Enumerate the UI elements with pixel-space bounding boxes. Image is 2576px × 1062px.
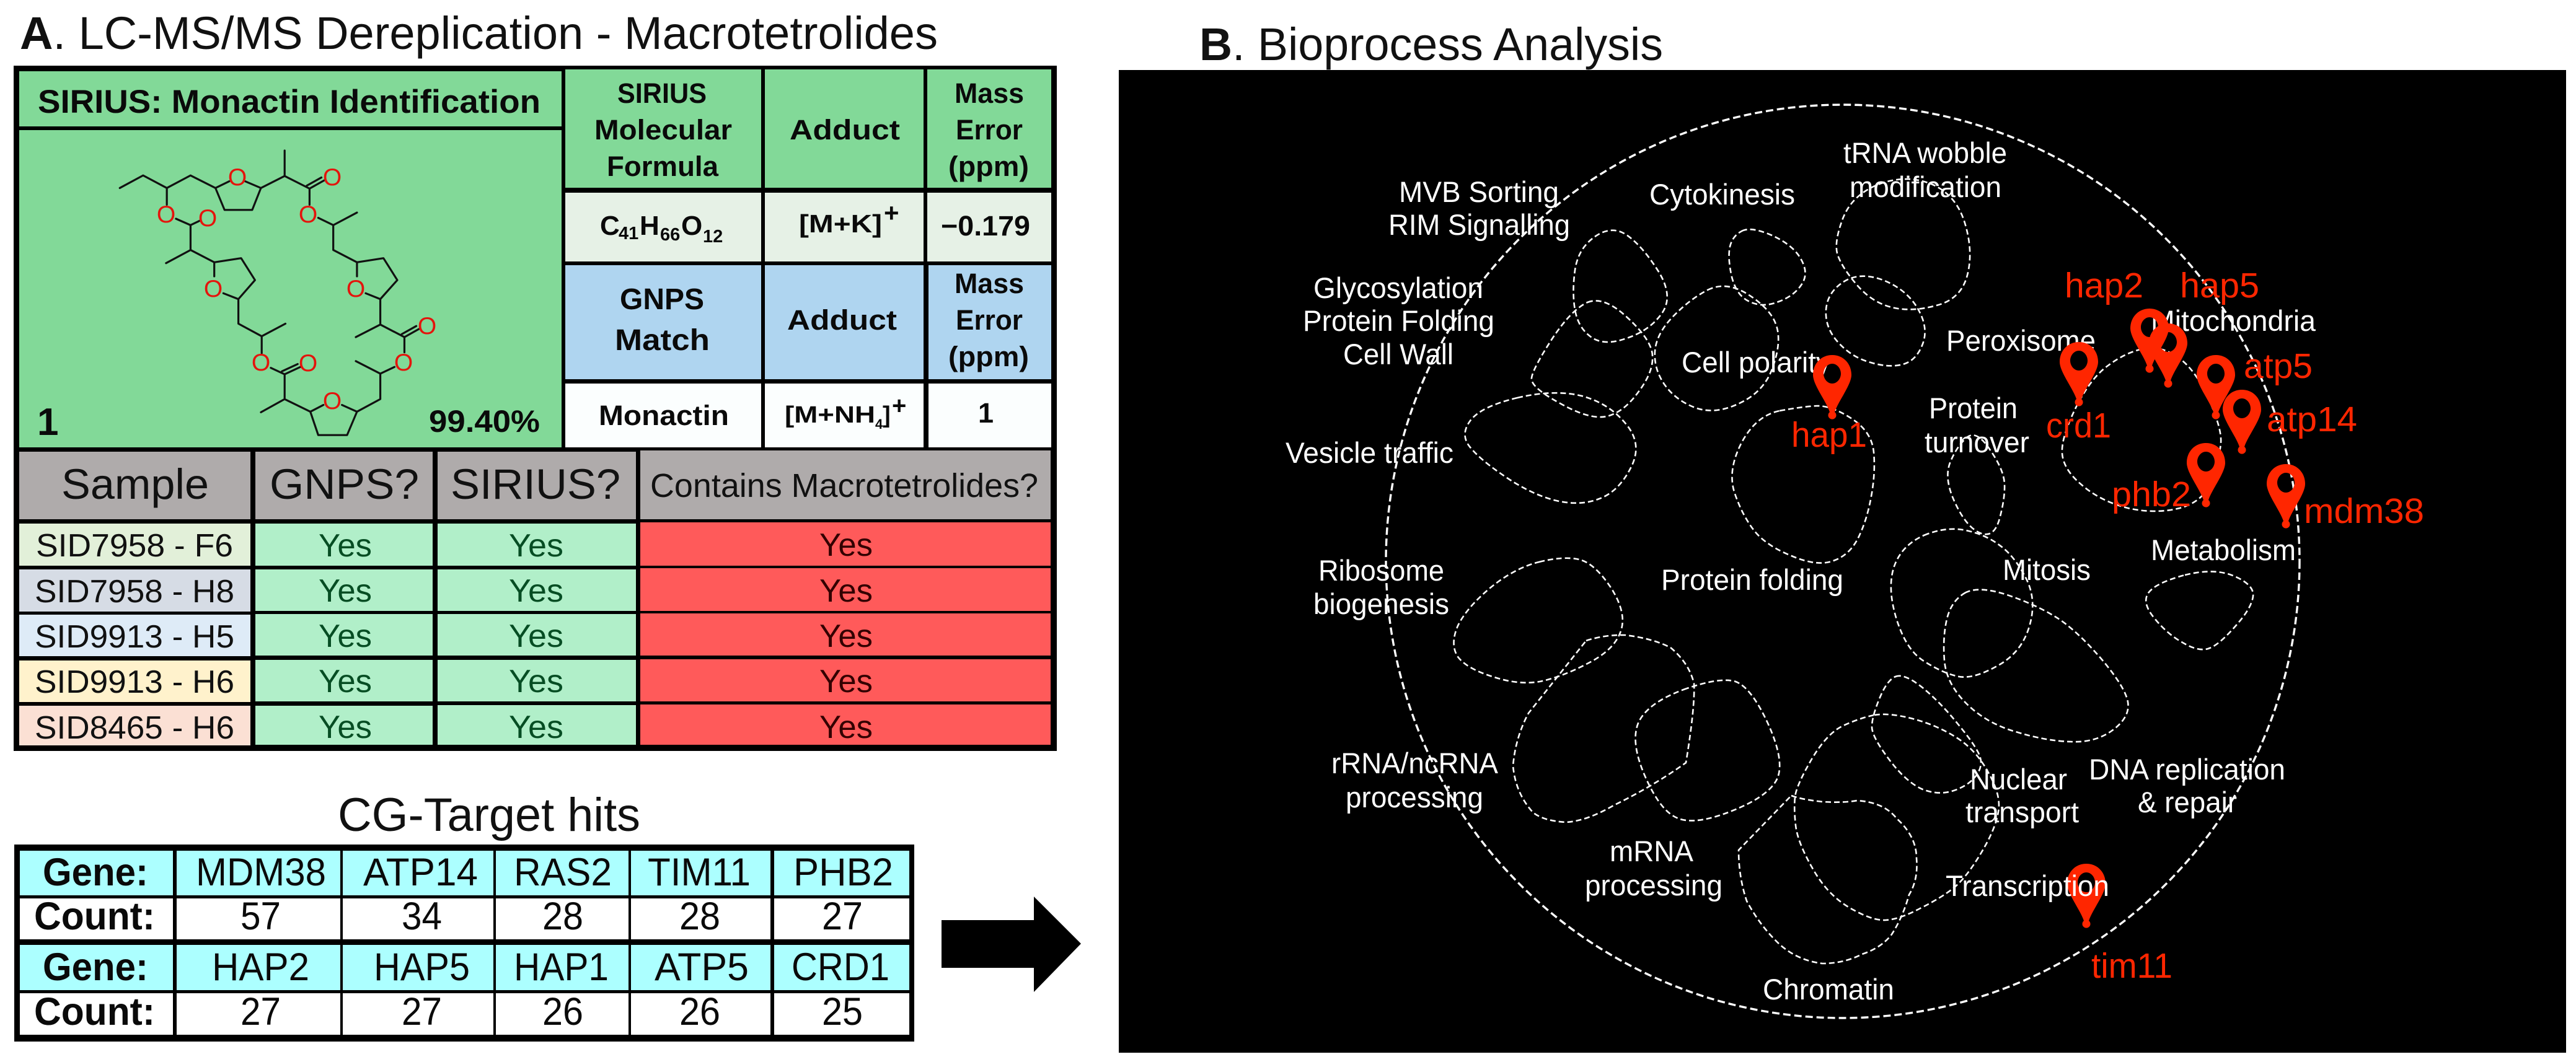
row: SID7958 - H8: Yes bbox=[319, 573, 372, 609]
labels: gene hits: hap5 bbox=[2180, 266, 2259, 305]
panel: SIRIUS formula table: SIRIUS bbox=[617, 77, 707, 109]
labels: bioprocess names bbox=[1286, 136, 2316, 1006]
labels: gene hits: crd1 bbox=[2046, 406, 2111, 445]
panel: SIRIUS formula table bbox=[565, 69, 1051, 261]
panel: CG-Target hits table bbox=[14, 845, 914, 1042]
row: SID8465 - H6 bbox=[19, 704, 1051, 746]
chemical structure: monactin: O bbox=[198, 205, 217, 232]
row: gene names top: MDM38 bbox=[196, 851, 326, 894]
row: SID7958 - F6: Yes bbox=[819, 527, 873, 563]
labels: gene hits: tim11 bbox=[2091, 946, 2172, 986]
labels: bioprocess names: Chromatin bbox=[1763, 973, 1894, 1006]
labels: gene hits: phb2 bbox=[2112, 475, 2191, 514]
labels: bioprocess names: Protein Folding bbox=[1303, 304, 1494, 337]
row: gene names top: Gene: bbox=[43, 851, 148, 894]
row: gene names bottom: HAP2 bbox=[212, 946, 309, 989]
match score: 99.40% bbox=[429, 404, 540, 439]
panel: GNPS match table: Mass bbox=[955, 268, 1024, 299]
row: SID9913 - H5 bbox=[19, 613, 1051, 656]
row: SID8465 - H6: SID8465 - H6 bbox=[35, 710, 234, 746]
table header row: Contains Macrotetrolides? bbox=[650, 467, 1038, 504]
row: counts bottom: 25 bbox=[822, 990, 863, 1033]
panel: GNPS match table: Adduct bbox=[787, 304, 897, 336]
labels: bioprocess names: rRNA/ncRNA bbox=[1331, 747, 1499, 779]
panel: GNPS match table: Match bbox=[615, 324, 710, 357]
row: gene names top: ATP14 bbox=[363, 851, 478, 894]
labels: bioprocess names: RIM Signalling bbox=[1388, 208, 1570, 241]
row: SID9913 - H6: SID9913 - H6 bbox=[35, 664, 234, 700]
panel: SIRIUS formula table: 41 bbox=[619, 224, 638, 244]
row: SID9913 - H6: Yes bbox=[319, 664, 372, 700]
row: SID7958 - H8: Yes bbox=[819, 573, 873, 609]
row: SID7958 - F6: SID7958 - F6 bbox=[36, 528, 233, 564]
row: SID9913 - H6: Yes bbox=[819, 664, 873, 700]
row: gene names bottom: ATP5 bbox=[655, 946, 749, 989]
panel: GNPS match table: ] bbox=[883, 402, 891, 428]
row: SID7958 - F6: Yes bbox=[319, 528, 372, 564]
labels: bioprocess names: modification bbox=[1850, 170, 2001, 203]
row: counts bottom: 26 bbox=[542, 990, 583, 1033]
labels: gene hits: mdm38 bbox=[2304, 491, 2424, 531]
chemical structure: monactin: O bbox=[323, 164, 342, 191]
labels: gene hits: atp14 bbox=[2267, 400, 2357, 439]
label: Transcription: Transcription bbox=[1946, 869, 2109, 902]
labels: bioprocess names: Mitochondria bbox=[2151, 304, 2316, 337]
panel: SIRIUS formula table: O bbox=[681, 211, 702, 241]
row: SID8465 - H6: Yes bbox=[509, 709, 563, 745]
row: counts top: 28 bbox=[679, 895, 720, 938]
chart: process cluster outlines bbox=[1454, 179, 2253, 963]
row: gene names top: RAS2 bbox=[514, 851, 612, 894]
panel: SIRIUS formula table: Adduct bbox=[790, 114, 900, 146]
labels: bioprocess names: processing bbox=[1585, 869, 1722, 902]
icon: map pins bbox=[1813, 309, 2305, 928]
row: SID8465 - H6: Yes bbox=[319, 709, 372, 745]
table header row: GNPS? bbox=[270, 460, 419, 508]
labels: bioprocess names: Cell Wall bbox=[1343, 338, 1453, 371]
row: counts top: 28 bbox=[542, 895, 583, 938]
chemical structure: monactin: O bbox=[157, 201, 175, 228]
row: counts top: 27 bbox=[822, 895, 863, 938]
chemical structure: monactin: O bbox=[394, 349, 413, 376]
heading: SIRIUS identification: SIRIUS: Monactin Identification bbox=[38, 84, 540, 120]
row: SID9913 - H6: Yes bbox=[509, 664, 563, 700]
labels: bioprocess names: Protein bbox=[1929, 392, 2018, 424]
labels: bioprocess names: Cell polarity bbox=[1682, 346, 1830, 379]
labels: gene hits: hap1 bbox=[1791, 415, 1867, 455]
panel: bioprocess map bbox=[1119, 70, 2566, 1053]
row: SID9913 - H5: Yes bbox=[319, 618, 372, 654]
panel: SIRIUS formula table: 12 bbox=[703, 227, 723, 247]
panel: GNPS match table: [M+NH bbox=[785, 402, 875, 428]
row: counts top: 34 bbox=[402, 895, 442, 938]
table header row: Sample bbox=[61, 460, 209, 508]
row: gene names bottom: Gene: bbox=[43, 946, 148, 989]
panel: dereplication table bbox=[14, 66, 1057, 751]
labels: bioprocess names: biogenesis bbox=[1313, 587, 1449, 620]
panel: SIRIUS formula table: 66 bbox=[660, 225, 680, 245]
labels: bioprocess names: Nuclear bbox=[1970, 763, 2067, 796]
row: SID7958 - H8 bbox=[19, 568, 1051, 612]
panel: SIRIUS formula table: [M+K] bbox=[799, 209, 882, 238]
panel: SIRIUS formula table: + bbox=[884, 198, 899, 227]
labels: bioprocess names: Glycosylation bbox=[1313, 271, 1483, 304]
panel: SIRIUS formula table: Mass bbox=[955, 77, 1024, 109]
row: gene names bottom: HAP1 bbox=[514, 946, 609, 989]
row: gene names bottom bbox=[20, 945, 909, 990]
row: SID8465 - H6: Yes bbox=[819, 709, 873, 745]
chemical structure: monactin: O bbox=[228, 164, 247, 191]
row: gene names bottom: HAP5 bbox=[374, 946, 470, 989]
labels: bioprocess names: Metabolism bbox=[2151, 533, 2296, 566]
labels: bioprocess names: Mitosis bbox=[2003, 553, 2091, 586]
panel: GNPS match table: (ppm) bbox=[948, 341, 1029, 372]
row: SID9913 - H5: Yes bbox=[509, 618, 563, 654]
panel: GNPS match table: 4 bbox=[875, 416, 883, 432]
row: SID7958 - H8: Yes bbox=[509, 573, 563, 609]
labels: bioprocess names: mRNA bbox=[1610, 835, 1694, 867]
row: gene names top: PHB2 bbox=[793, 851, 893, 894]
panel: GNPS match table: 1 bbox=[978, 397, 994, 429]
labels: bioprocess names: Ribosome bbox=[1318, 554, 1444, 587]
compound number: 1 bbox=[37, 401, 58, 444]
panel: SIRIUS formula table: −0.179 bbox=[941, 210, 1030, 242]
chemical structure: monactin: O bbox=[418, 313, 436, 340]
chemical structure: monactin: O bbox=[204, 276, 223, 302]
row: counts top: 57 bbox=[240, 895, 281, 938]
labels: bioprocess names: & repair bbox=[2138, 786, 2237, 818]
row: SID9913 - H5: SID9913 - H5 bbox=[35, 619, 234, 655]
labels: gene hits: hap2 bbox=[2065, 266, 2143, 305]
panel: SIRIUS formula table: Error bbox=[956, 114, 1023, 146]
arrow: to bioprocess analysis bbox=[942, 897, 1081, 992]
row: gene names bottom: CRD1 bbox=[792, 946, 889, 989]
chemical structure: monactin: O bbox=[299, 201, 317, 228]
panel: GNPS match table: Error bbox=[956, 304, 1023, 336]
row: counts bottom: Count: bbox=[34, 990, 155, 1033]
chemical structure: monactin: O bbox=[323, 388, 342, 415]
labels: gene hits: atp5 bbox=[2244, 346, 2313, 386]
row: gene names top: TIM11 bbox=[648, 851, 751, 894]
labels: bioprocess names: MVB Sorting bbox=[1399, 175, 1559, 208]
panel: sample results table bbox=[19, 450, 1051, 746]
labels: bioprocess names: Cytokinesis bbox=[1649, 178, 1795, 211]
chemical structure: monactin: O bbox=[299, 350, 317, 377]
row: gene names top bbox=[20, 851, 909, 895]
labels: gene hits bbox=[1791, 266, 2424, 986]
table header row: SIRIUS? bbox=[451, 460, 620, 508]
labels: bioprocess names: tRNA wobble bbox=[1843, 136, 2007, 169]
panel: GNPS match table: + bbox=[892, 392, 906, 419]
row: SID7958 - F6 bbox=[19, 522, 1051, 566]
heading: CG-Target hits: CG-Target hits bbox=[338, 789, 640, 841]
labels: bioprocess names: Vesicle traffic bbox=[1286, 436, 1453, 469]
row: counts bottom: 26 bbox=[679, 990, 720, 1033]
chemical structure: monactin bbox=[120, 151, 436, 435]
panel: SIRIUS formula table: C bbox=[600, 211, 620, 241]
panel: GNPS match table bbox=[565, 265, 1051, 447]
labels: bioprocess names: turnover bbox=[1925, 426, 2029, 459]
row: SID9913 - H5: Yes bbox=[819, 618, 873, 654]
table header row bbox=[19, 450, 1051, 519]
chemical structure: monactin: O bbox=[252, 349, 270, 376]
row: counts bottom: 27 bbox=[402, 990, 442, 1033]
title: panel B heading: B. Bioprocess Analysis bbox=[1199, 19, 1663, 70]
panel: SIRIUS monactin identification bbox=[19, 71, 562, 447]
labels: bioprocess names: Protein folding bbox=[1661, 563, 1843, 596]
chart: global bioprocess circle bbox=[1386, 105, 2300, 1018]
panel: SIRIUS formula table: Molecular bbox=[594, 114, 732, 146]
chemical structure: monactin: O bbox=[346, 276, 365, 302]
labels: bioprocess names: DNA replication bbox=[2089, 753, 2285, 786]
title: panel A heading: A. LC-MS/MS Dereplication - Macrotetrolides bbox=[20, 7, 938, 59]
panel: GNPS match table: GNPS bbox=[620, 283, 704, 316]
panel: GNPS match table: Monactin bbox=[599, 400, 729, 431]
panel: SIRIUS formula table: Formula bbox=[607, 151, 719, 182]
row: counts top bbox=[20, 895, 909, 939]
row: counts top: Count: bbox=[34, 895, 155, 938]
row: SID7958 - F6: Yes bbox=[509, 528, 563, 564]
labels: bioprocess names: processing bbox=[1346, 781, 1483, 814]
row: SID7958 - H8: SID7958 - H8 bbox=[35, 574, 234, 610]
row: SID9913 - H6 bbox=[19, 659, 1051, 702]
row: counts bottom: 27 bbox=[240, 990, 281, 1033]
panel: SIRIUS formula table: (ppm) bbox=[948, 151, 1029, 182]
labels: bioprocess names: Peroxisome bbox=[1946, 324, 2096, 357]
labels: bioprocess names: transport bbox=[1965, 796, 2079, 828]
row: counts bottom bbox=[20, 990, 909, 1035]
panel: SIRIUS formula table: H bbox=[640, 211, 659, 241]
